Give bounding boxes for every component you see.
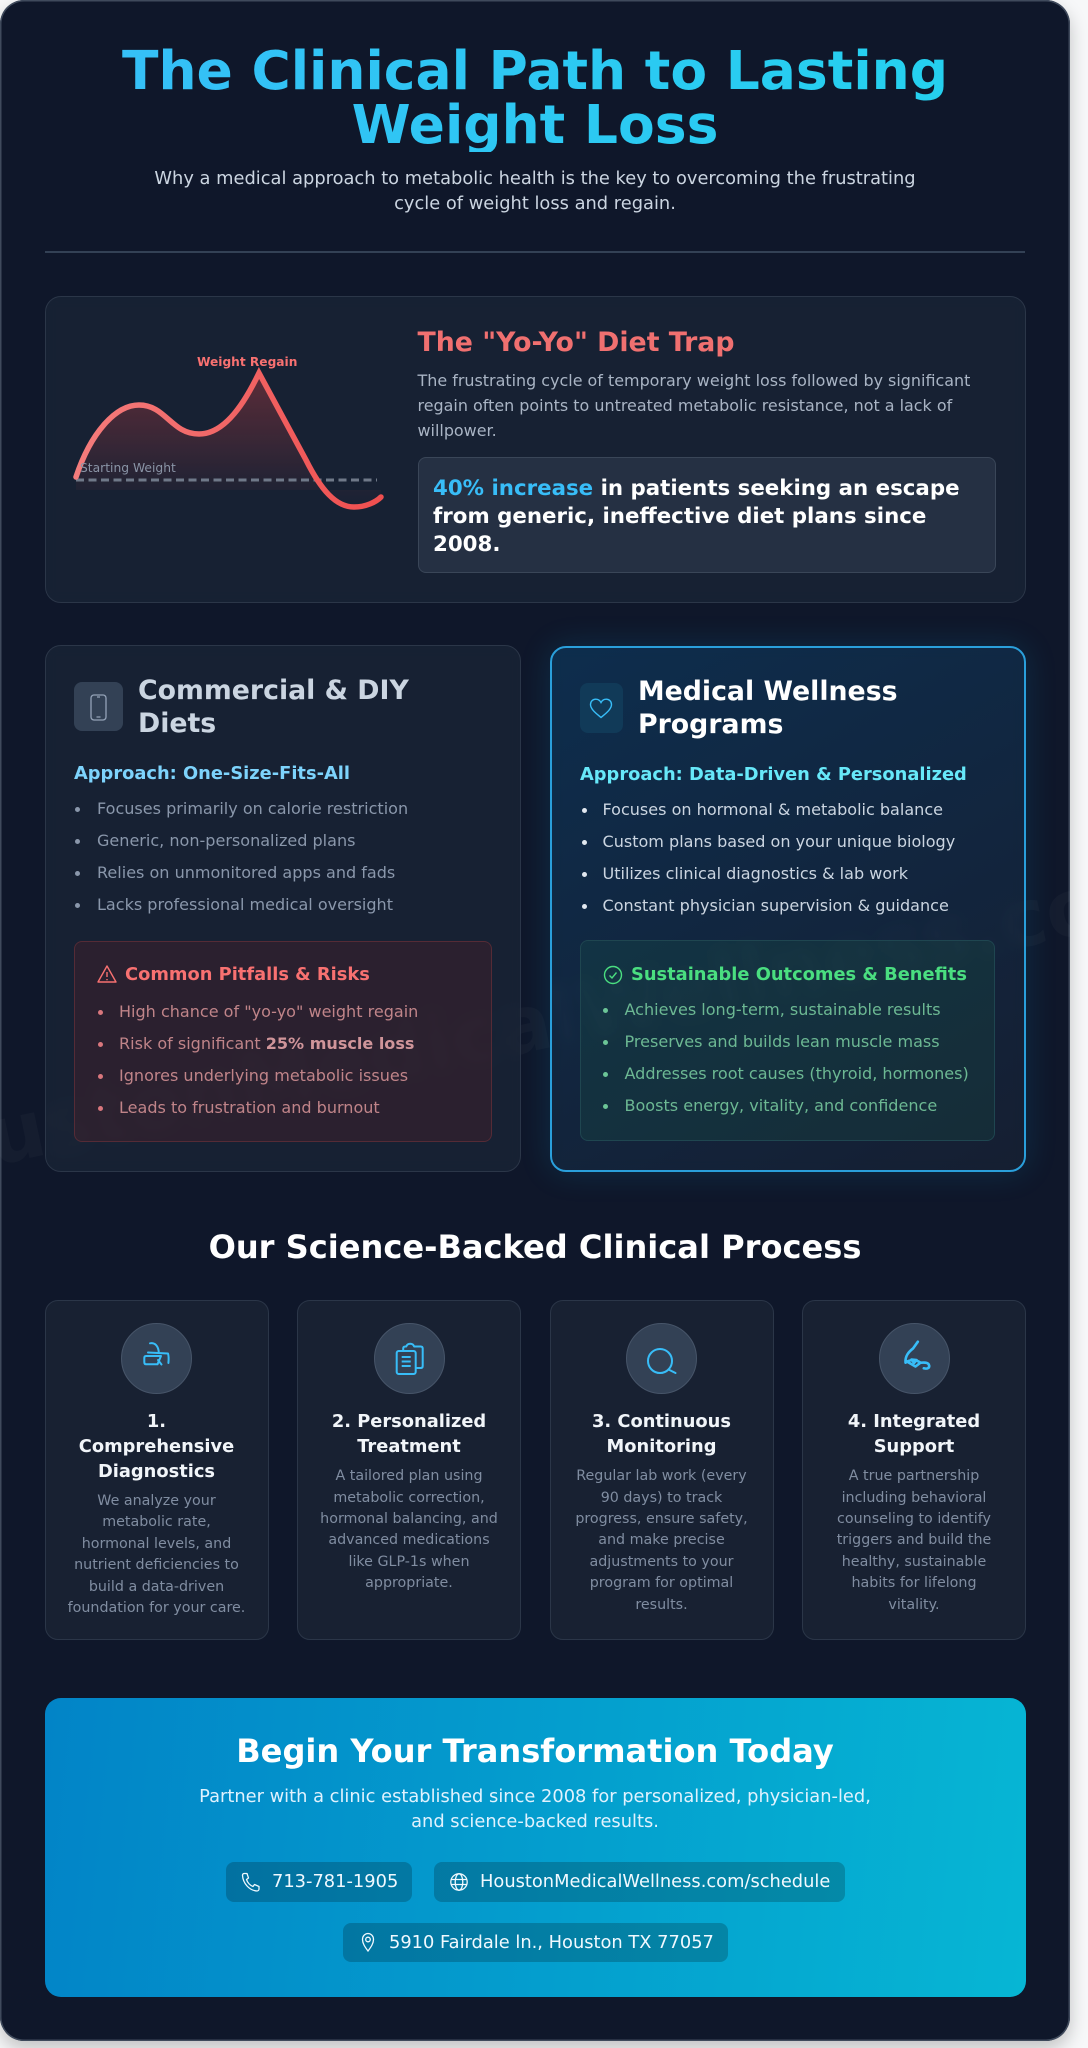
step text: program for optimal [590,1575,733,1591]
step title: 2. Personalized [332,1411,486,1432]
step title: 1. [147,1411,166,1432]
step text: including behavioral [842,1490,986,1506]
subtitle: Why a medical approach to metabolic health is the key to overcoming the frustrating [154,168,916,188]
icon: clipboards [374,1323,444,1394]
step text: habits for lifelong [851,1575,977,1591]
chart: weight cycle line [73,355,384,510]
step title: Comprehensive [79,1436,234,1457]
icon: location pin [362,1932,374,1952]
list: commercial features: Lacks professional medical oversight [97,895,393,914]
list: benefits: Addresses root causes (thyroid, hormones) [624,1064,969,1083]
panel: yo-yo diet trap [44,296,1026,603]
text: cta description: Partner with a clinic established since 2008 for personalized, physician-led, [199,1786,871,1806]
approach label: Approach: Data-Driven & Personalized [580,764,967,784]
heading: medical: Programs [638,708,783,740]
icon: heart [580,682,622,732]
step text [575,1468,748,1613]
panel: call to action [44,1698,1026,1997]
step text: nutrient deficiencies to [74,1557,239,1573]
list: pitfalls [98,1002,418,1117]
list: pitfalls: Leads to frustration and burnout [119,1098,380,1117]
step text: metabolic rate, [102,1514,211,1530]
text: cta description [199,1786,871,1832]
step text: build a data-driven [89,1579,224,1595]
panel: step 1 [44,1300,268,1640]
icon: support hands [878,1323,950,1394]
chart: weight cycle line: Starting Weight [80,461,175,475]
title [2,44,1068,152]
icon: check circle [604,966,622,984]
callout: 40% stat [418,457,996,573]
panel: pitfalls and risks [74,941,492,1142]
pill: address [343,1922,728,1962]
panel: step 4 [802,1300,1026,1640]
title: Weight Loss [352,92,718,156]
step text: appropriate. [365,1575,453,1591]
list: medical features: Custom plans based on your unique biology [602,832,955,851]
list: benefits: Boosts energy, vitality, and confidence [624,1096,937,1115]
heading: clinical process: Our Science-Backed Clinical Process [209,1228,861,1266]
text: yo-yo description: willpower. [418,421,497,440]
step text: progress, ensure safety, [575,1511,748,1527]
text: yo-yo description: The frustrating cycle of temporary weight loss followed by significant [418,371,970,390]
icon: diagnostics [121,1323,192,1394]
step title: Support [874,1436,954,1457]
icon: phone [74,682,123,731]
subtitle [154,168,916,214]
step text [837,1468,991,1613]
step title [79,1411,234,1482]
list: pitfalls: High chance of "yo-yo" weight regain [119,1002,418,1021]
stat text [433,476,960,556]
step text: triggers and build the [837,1532,991,1548]
title: The Clinical Path to Lasting [122,38,948,102]
heading: medical [638,676,898,740]
stat text: from generic, ineffective diet plans since [433,504,926,528]
icon: globe [450,1873,468,1891]
step text: healthy, sustainable [842,1554,986,1570]
step title: 4. Integrated [848,1411,980,1432]
step title [592,1411,731,1457]
heading: commercial: Diets [138,708,216,739]
step text: advanced medications [328,1532,490,1548]
list: benefits: Preserves and builds lean muscle mass [624,1032,940,1051]
list: pitfalls: Ignores underlying metabolic issues [119,1066,408,1085]
step text [68,1493,245,1616]
step text: results. [635,1597,688,1613]
list: pitfalls: Risk of significant 25% muscle loss [119,1034,414,1053]
step title: 3. Continuous [592,1411,731,1432]
text: yo-yo description [417,371,970,440]
step text: like GLP-1s when [348,1554,470,1570]
step title [332,1411,486,1457]
step text: A tailored plan using [335,1468,483,1484]
step text: We analyze your [97,1493,216,1509]
step text: 90 days) to track [601,1490,722,1506]
step text: counseling to identify [837,1511,991,1527]
panel: step 3 [550,1300,774,1640]
pill: website: HoustonMedicalWellness.com/schedule [480,1871,830,1892]
heading: pitfalls: Common Pitfalls & Risks [125,964,370,985]
list: medical features [582,800,955,915]
list: commercial features: Relies on unmonitored apps and fads [97,863,395,882]
text: yo-yo description: regain often points to untreated metabolic resistance, not a lack of [418,396,952,415]
chart: weight cycle line: Weight Regain [196,355,297,369]
heading: medical: Medical Wellness [638,676,898,706]
step text: hormonal balancing, and [320,1511,498,1527]
heading: outcomes: Sustainable Outcomes & Benefits [631,964,967,984]
pill: website [434,1862,845,1902]
list: medical features: Constant physician supervision & guidance [602,896,949,915]
step text: Regular lab work (every [576,1468,747,1484]
heading: commercial: Commercial & DIY [138,675,409,706]
panel: medical wellness programs [550,646,1026,1172]
list: commercial features: Generic, non-personalized plans [97,831,355,850]
list: medical features: Utilizes clinical diagnostics & lab work [602,864,908,883]
pill: phone [226,1862,412,1902]
list: benefits: Achieves long-term, sustainable results [624,1000,941,1019]
list: benefits [603,1000,969,1115]
step title: Treatment [357,1436,461,1457]
panel: commercial and DIY diets [45,645,521,1172]
step title [848,1411,980,1457]
stat text: 2008. [433,532,500,556]
approach label: Approach: One-Size-Fits-All [74,762,350,784]
heading: cta: Begin Your Transformation Today [236,1732,834,1770]
step text: A true partnership [849,1468,979,1484]
icon: phone handset [242,1872,260,1892]
step text [320,1468,498,1591]
pill: address: 5910 Fairdale ln., Houston TX 77057 [389,1932,714,1952]
step title: Monitoring [607,1436,716,1457]
step text: adjustments to your [589,1554,734,1570]
step text: hormonal levels, and [82,1536,231,1552]
panel: step 2 [297,1300,521,1640]
list: medical features: Focuses on hormonal & metabolic balance [602,800,943,819]
text: cta description: and science-backed results. [411,1810,659,1832]
step text: metabolic correction, [333,1490,485,1506]
list: commercial features: Focuses primarily on calorie restriction [97,799,408,818]
panel: outcomes and benefits [580,940,995,1140]
subtitle: cycle of weight loss and regain. [394,192,676,214]
step title: Diagnostics [98,1461,215,1482]
heading: commercial [138,675,410,739]
icon: warning triangle [97,965,117,983]
icon: magnifier [626,1323,697,1394]
pill: phone: 713-781-1905 [272,1871,398,1892]
step text: foundation for your care. [68,1600,245,1616]
list: commercial features [75,799,408,914]
step text: vitality. [888,1597,940,1613]
stat text: 40% increase in patients seeking an escape [433,476,960,500]
heading: yo-yo: The "Yo-Yo" Diet Trap [418,327,735,358]
step text: and make precise [598,1532,725,1548]
